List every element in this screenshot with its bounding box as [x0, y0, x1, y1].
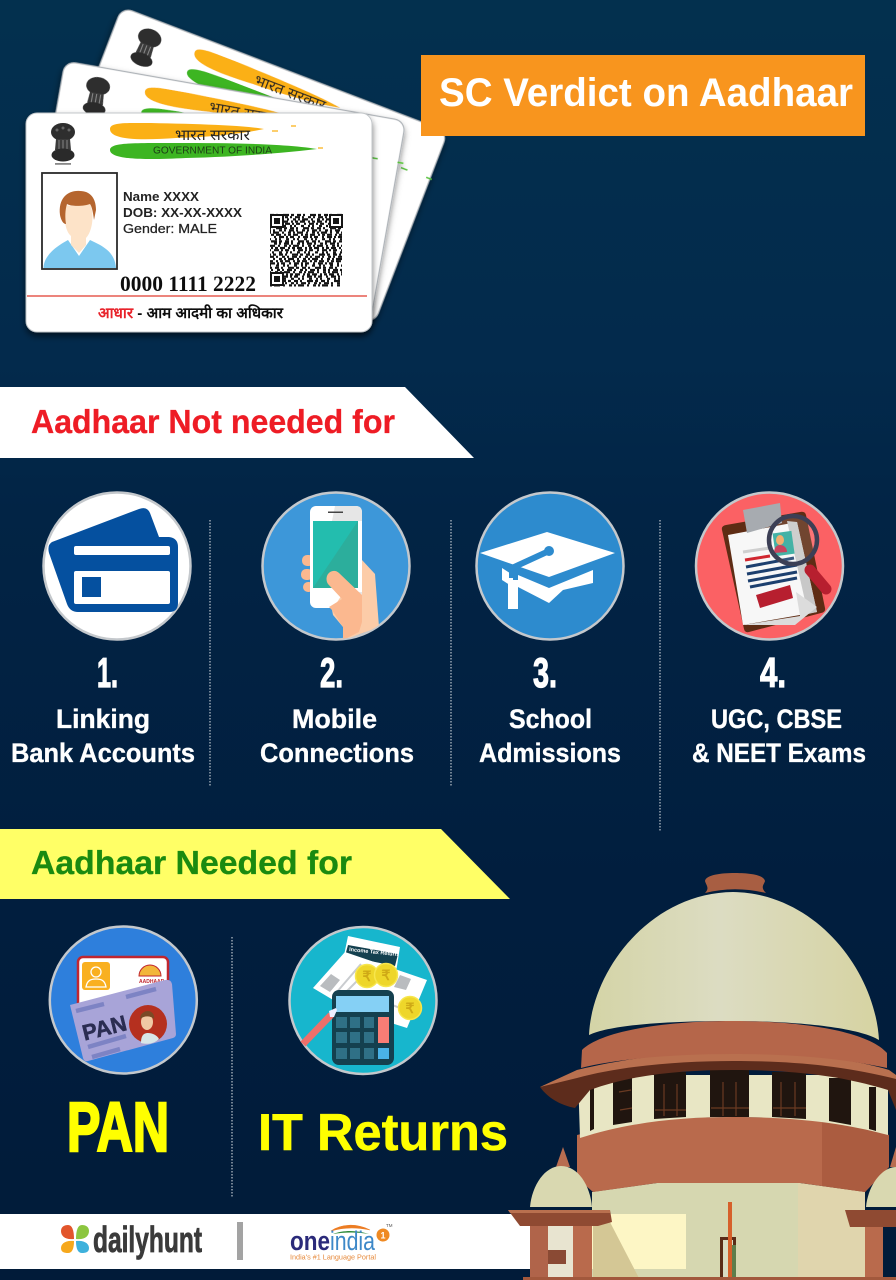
- oneindia logo: TM: [386, 1223, 393, 1228]
- Hindi government heading: भारत सरकार: [175, 127, 251, 144]
- section banner: needed: [0, 829, 510, 899]
- section banner: needed: Aadhaar Needed for: [31, 844, 352, 881]
- item 1: linking bank accounts: [11, 492, 195, 768]
- upper red band: [581, 1021, 887, 1068]
- eave: [540, 1052, 896, 1110]
- red rule: [27, 295, 367, 297]
- icon: PAN and Aadhaar cards: [50, 926, 197, 1074]
- number 2: 2.: [320, 649, 343, 696]
- label: [260, 704, 414, 768]
- rear Aadhaar card: [49, 7, 450, 324]
- label: Linking: [56, 704, 150, 734]
- icon: graduation cap: [476, 492, 624, 640]
- photo portrait: [42, 173, 117, 269]
- icon: tax return and calculator: ₹: [382, 967, 391, 983]
- Hindi slogan: आधार - आम आदमी का अधिकार: [98, 304, 284, 322]
- saffron and green stripes: [110, 123, 323, 159]
- front Aadhaar card: [26, 113, 372, 332]
- icon: tax return and calculator: Income Tax Return: [349, 947, 399, 958]
- oneindia logo: India's #1 Language Portal: [290, 1252, 376, 1262]
- label: [479, 704, 621, 768]
- label: UGC, CBSE: [711, 704, 842, 734]
- personal details: DOB: XX-XX-XXXX: [123, 206, 243, 220]
- base strip: [523, 1277, 896, 1280]
- label: [11, 704, 195, 768]
- oneindia logo: one: [290, 1226, 330, 1256]
- icon: hand holding phone: [262, 492, 410, 640]
- main dome: [589, 892, 879, 1040]
- national emblem: [51, 123, 75, 165]
- label: Mobile: [292, 704, 377, 734]
- title banner: [421, 55, 865, 136]
- dailyhunt logo: [61, 1219, 202, 1260]
- section banner: not needed: [0, 387, 474, 458]
- item 2: mobile connections: [260, 492, 414, 768]
- Aadhaar number: 0000 1111 2222: [120, 271, 256, 296]
- dotted dividers: [210, 520, 660, 1197]
- dome cap: [705, 873, 766, 893]
- item: PAN: [50, 926, 197, 1166]
- personal details: Name XXXX: [123, 190, 200, 204]
- footer strip: [0, 1214, 686, 1269]
- dailyhunt logo: dailyhunt: [93, 1219, 202, 1260]
- item 4: UGC, CBSE and NEET exams: [692, 492, 866, 768]
- oneindia logo: [290, 1223, 393, 1262]
- right pavilion: [845, 1147, 896, 1280]
- icon: PAN and Aadhaar cards: PAN: [80, 1010, 129, 1045]
- icon: PAN and Aadhaar cards: AADHAAR: [139, 979, 165, 985]
- QR code: [270, 215, 342, 285]
- label: School: [509, 704, 592, 734]
- left pavilion: [508, 1147, 612, 1280]
- title banner: SC Verdict on Aadhaar: [439, 71, 853, 115]
- label: Admissions: [479, 738, 621, 768]
- flag and doorway: [720, 1202, 736, 1280]
- oneindia logo: india: [330, 1226, 376, 1256]
- middle Aadhaar card: [28, 61, 411, 331]
- icon: tax return and calculator: ₹: [406, 1000, 415, 1016]
- colonnade: [578, 1070, 888, 1138]
- number 1: 1.: [97, 649, 118, 696]
- facade shadow: [593, 1214, 640, 1280]
- Aadhaar cards illustration: [26, 7, 450, 332]
- item: IT returns: [258, 927, 508, 1162]
- icon: bank cards: [44, 492, 190, 640]
- label: [692, 704, 866, 768]
- rear Aadhaar card: भारत सरकार: [252, 72, 329, 115]
- section banner: not needed: Aadhaar Not needed for: [31, 403, 395, 440]
- Supreme Court building: lower facade: [592, 1183, 865, 1280]
- Supreme Court building: [508, 873, 896, 1280]
- personal details: Gender: MALE: [123, 222, 217, 236]
- label: & NEET Exams: [692, 738, 866, 768]
- icon: tax return and calculator: [290, 927, 436, 1074]
- label: IT Returns: IT Returns: [258, 1104, 508, 1162]
- lower red drum: [577, 1117, 889, 1192]
- personal details: [123, 190, 243, 236]
- label: Bank Accounts: [11, 738, 195, 768]
- icon: clipboard and magnifier: [696, 492, 843, 640]
- oneindia logo: 1: [380, 1230, 386, 1240]
- number 4: 4.: [760, 649, 786, 696]
- middle Aadhaar card: भारत सरकार: [208, 99, 285, 129]
- government of India text: GOVERNMENT OF INDIA: [153, 146, 272, 156]
- logo divider: [237, 1222, 243, 1260]
- label: PAN: PAN: [67, 1088, 169, 1166]
- item 3: school admissions: [476, 492, 624, 768]
- number 3: 3.: [533, 649, 557, 696]
- icon: tax return and calculator: ₹: [363, 968, 372, 984]
- label: Connections: [260, 738, 414, 768]
